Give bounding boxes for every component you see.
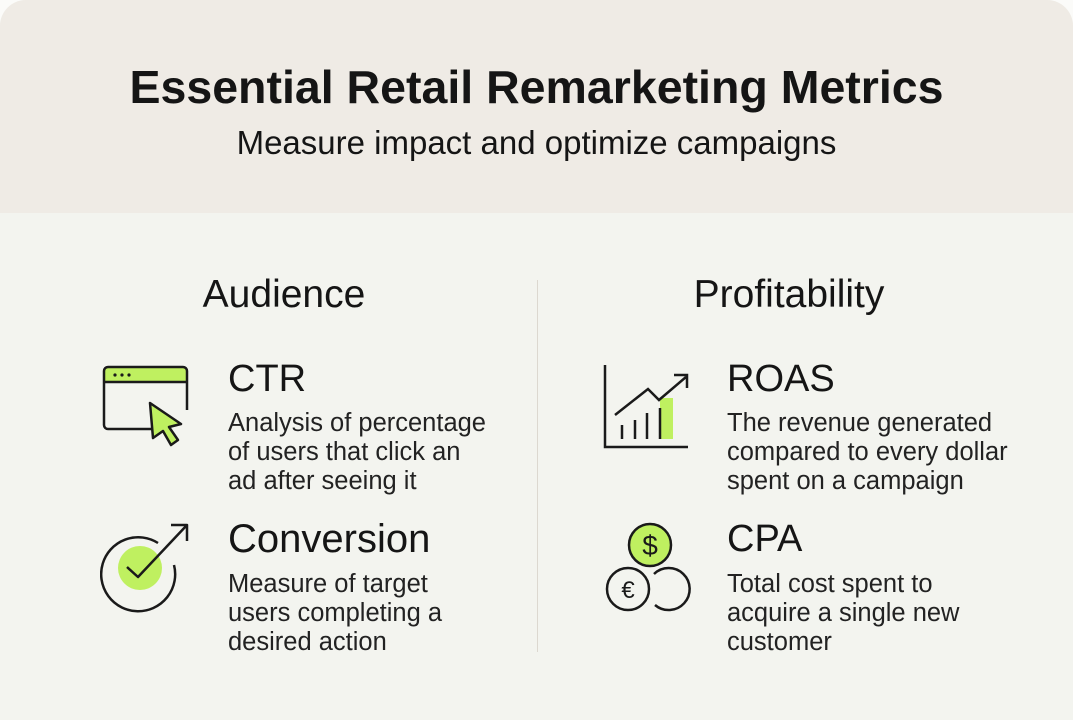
subtitle: Measure impact and optimize campaigns bbox=[237, 124, 836, 161]
metric: ROAS: The revenue generated bbox=[727, 409, 992, 437]
metric: CPA: customer bbox=[727, 628, 832, 656]
icon: coins bbox=[606, 522, 691, 612]
metric: CPA: CPA bbox=[727, 518, 802, 560]
metric: CPA: Total cost spent to bbox=[727, 570, 933, 598]
title: Essential Retail Remarketing Metrics bbox=[129, 61, 944, 113]
icon: coins: $ bbox=[642, 530, 658, 561]
icon: browser click bbox=[102, 366, 188, 446]
metric: ROAS: compared to every dollar bbox=[727, 438, 1008, 466]
header band bbox=[0, 0, 1073, 213]
metric: ROAS bbox=[727, 358, 1008, 495]
metric: Conversion: users completing a bbox=[228, 599, 442, 627]
metric: CPA bbox=[727, 518, 960, 656]
icon: target check bbox=[100, 524, 188, 612]
metric: CPA: acquire a single new bbox=[727, 599, 959, 627]
metric: Conversion: desired action bbox=[228, 628, 387, 656]
metric: Conversion: Conversion bbox=[228, 517, 430, 561]
metric: CTR: of users that click an bbox=[228, 438, 460, 466]
metric: ROAS: ROAS bbox=[727, 358, 835, 400]
metric: ROAS: spent on a campaign bbox=[727, 467, 964, 495]
metric: CTR: CTR bbox=[228, 358, 306, 400]
divider bbox=[537, 280, 538, 652]
metric: CTR: ad after seeing it bbox=[228, 467, 417, 495]
metric: CTR: Analysis of percentage bbox=[228, 409, 486, 437]
metric: Conversion: Measure of target bbox=[228, 570, 428, 598]
heading: Profitability: Profitability bbox=[694, 273, 884, 316]
icon: coins: € bbox=[621, 577, 635, 604]
metric: CTR bbox=[228, 358, 486, 495]
heading: Audience: Audience bbox=[203, 273, 365, 316]
metric: Conversion bbox=[228, 517, 442, 656]
icon: growth chart bbox=[604, 365, 688, 448]
